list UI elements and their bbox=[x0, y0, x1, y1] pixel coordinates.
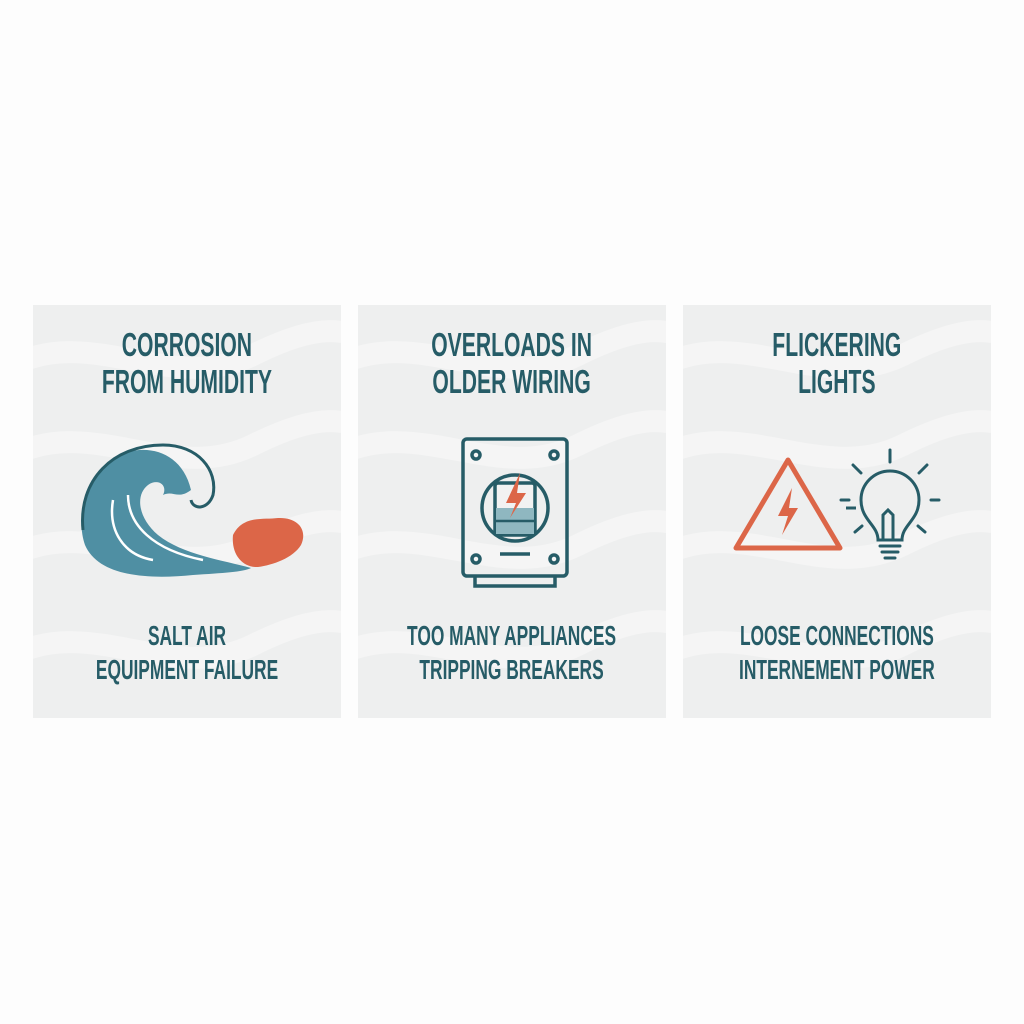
caption: INTERNEMENT POWER bbox=[739, 654, 935, 685]
title bbox=[102, 326, 272, 400]
title: OLDER WIRING bbox=[433, 363, 591, 400]
icon: breaker panel bbox=[461, 437, 569, 588]
caption bbox=[739, 620, 935, 685]
title: OVERLOADS IN bbox=[432, 326, 592, 363]
panel: corrosion bbox=[33, 305, 341, 718]
title: FLICKERING bbox=[772, 326, 902, 363]
caption: TOO MANY APPLIANCES bbox=[408, 620, 616, 651]
title: CORROSION bbox=[122, 326, 252, 363]
icon: wave and rust bbox=[81, 444, 304, 577]
icon: warning and bulb bbox=[734, 448, 940, 560]
title bbox=[432, 326, 592, 400]
caption bbox=[407, 620, 616, 685]
caption: SALT AIR bbox=[148, 620, 226, 651]
caption: TRIPPING BREAKERS bbox=[420, 654, 604, 685]
title: FROM HUMIDITY bbox=[102, 363, 272, 400]
title bbox=[772, 326, 902, 400]
title: LIGHTS bbox=[798, 363, 876, 400]
caption: LOOSE CONNECTIONS bbox=[740, 620, 934, 651]
panel: flickering bbox=[683, 305, 991, 718]
caption bbox=[96, 620, 278, 685]
panel: overloads bbox=[358, 305, 666, 718]
caption: EQUIPMENT FAILURE bbox=[96, 654, 278, 685]
